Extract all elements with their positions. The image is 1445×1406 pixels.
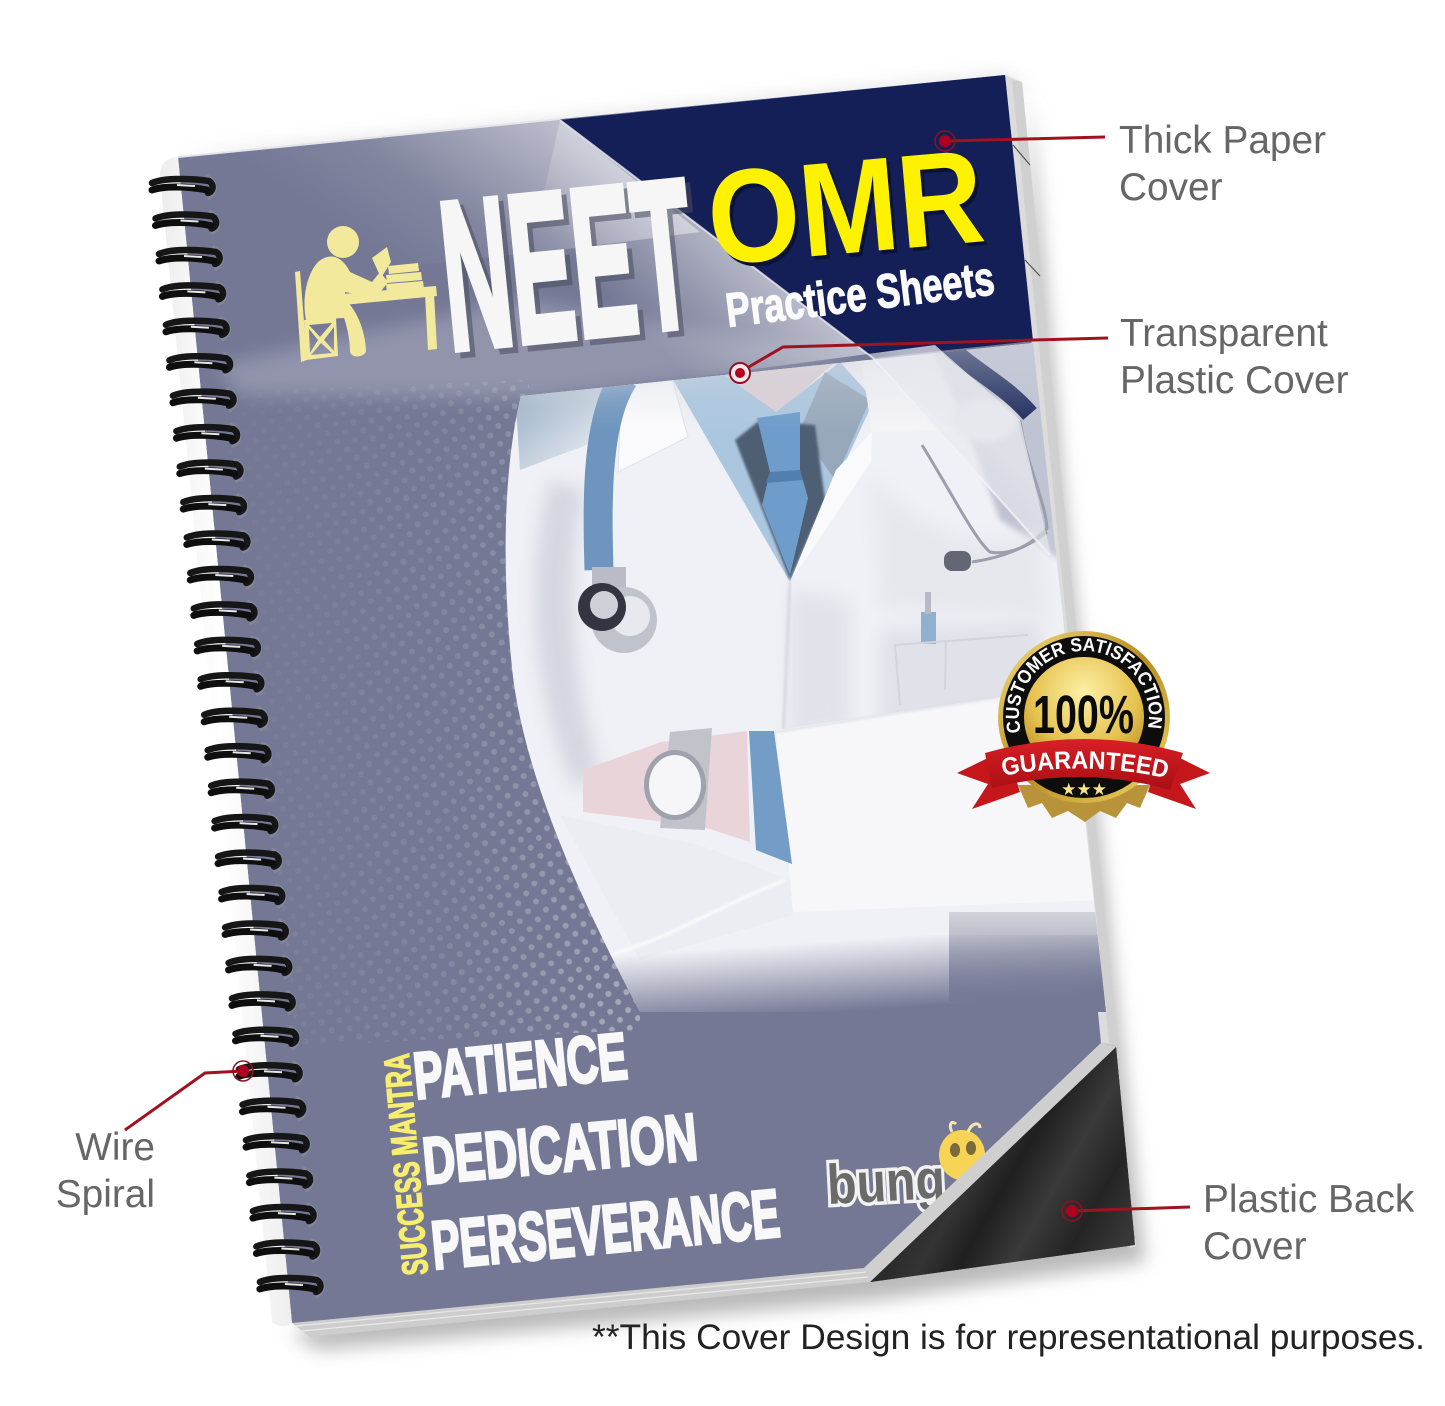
lower right dark area: [949, 912, 1119, 1002]
chair frame: [304, 317, 338, 360]
label: Transparent Plastic Cover: Plastic Cover: [1120, 359, 1349, 402]
label: Thick Paper Cover: Cover: [1119, 166, 1223, 209]
desk top: [342, 286, 437, 305]
gold seal points: [1018, 785, 1150, 822]
slogan: SUCCESS MANTRA: SUCCESS MANTRA: [376, 1052, 436, 1277]
panel: front cover: [178, 75, 1130, 1323]
hand and wrist: [583, 731, 750, 842]
desk leg: [425, 293, 437, 350]
book stack: [386, 263, 424, 292]
earpiece: [944, 551, 971, 571]
body and arm: [304, 257, 388, 320]
navy tube upper right: [948, 346, 1030, 414]
plastic back cover corner overlay: [864, 1043, 1135, 1282]
leg of student: [342, 300, 366, 356]
label: Wire Spiral: Wire: [75, 1126, 155, 1169]
back cover corner: [870, 1047, 1136, 1282]
title: NEET: [431, 134, 709, 401]
left white binding strip: [160, 157, 292, 1326]
title: OMR: OMR: [705, 126, 993, 298]
forearm sleeve: [780, 697, 1094, 900]
right stethoscope tubes: [922, 420, 1047, 562]
coat edge: [783, 582, 790, 740]
cover top edge highlight: [178, 119, 560, 157]
callout: wire spiral pointer: [125, 1061, 253, 1130]
title: OMR: OMR: [702, 122, 989, 294]
left collar: [618, 378, 688, 472]
pen: [921, 592, 936, 644]
label: Plastic Back Cover: Plastic Back: [1203, 1178, 1415, 1221]
head: [327, 226, 359, 258]
chair back: [295, 271, 307, 362]
footnote: **This Cover Design is for representational purposes.: [592, 1318, 1425, 1357]
paper block: right edge: [1005, 75, 1118, 1045]
wire spiral coils: [152, 177, 322, 1296]
lower coat fold: [560, 815, 793, 960]
text: NEET: [437, 140, 709, 400]
curved badge text: CUSTOMER SATISFACTION: [1006, 638, 1162, 733]
slogan: PATIENCE: PATIENCE: [410, 1018, 630, 1113]
paper block: bottom edge: [292, 1268, 870, 1337]
label: Wire Spiral: Spiral: [56, 1173, 155, 1216]
logo: bung bee: [825, 1122, 985, 1216]
navy header block: [560, 75, 1033, 358]
top fade: [594, 350, 1036, 420]
callout: transparent plastic cover pointer: [730, 338, 1108, 383]
badge black ring: [1003, 636, 1165, 798]
callout: plastic back cover pointer: [1062, 1201, 1190, 1221]
bottom fade: [614, 935, 1106, 1012]
blue shirt cuff: [749, 731, 792, 864]
pocket: [895, 635, 1028, 705]
label: Thick Paper Cover: Thick Paper: [1119, 119, 1326, 162]
halftone dots: [319, 380, 640, 1042]
badge: 100% customer satisfaction guaranteed: [957, 631, 1210, 822]
transparent film glare: [178, 120, 1052, 560]
neck: [710, 364, 833, 412]
icon: student reading at desk: [295, 226, 437, 362]
subtitle: Practice Sheets: Practice Sheets: [723, 252, 997, 338]
background top right: [948, 343, 1056, 560]
tie shadow: [735, 420, 825, 580]
book drop shadow: [178, 75, 1145, 1350]
shirt: [672, 362, 874, 582]
slogan: PERSEVERANCE: PERSEVERANCE: [428, 1175, 783, 1284]
blue stethoscope tube: [598, 378, 624, 570]
slogan: DEDICATION: DEDICATION: [420, 1099, 700, 1198]
coat shading: [535, 480, 600, 790]
logo: bung bee: bung: [825, 1147, 946, 1216]
text: NEET: [431, 134, 703, 395]
badge inner gold: [1024, 657, 1144, 777]
label: Transparent Plastic Cover: Transparent: [1120, 312, 1328, 355]
right collar and lapel: [861, 360, 874, 412]
tie: [757, 412, 808, 575]
doctor photo: [506, 343, 1106, 1012]
ribbon text: GUARANTEED: [1002, 751, 1168, 777]
open book: [372, 247, 391, 278]
badge gold ring: [998, 631, 1170, 803]
label: Plastic Back Cover: Cover: [1203, 1225, 1307, 1268]
stars: ★★★: [1061, 780, 1107, 800]
watch: [644, 728, 712, 830]
stethoscope chest piece: [578, 567, 657, 653]
badge percent: 100%: [1033, 685, 1134, 745]
callout: thick paper cover pointer: [935, 131, 1105, 151]
ribbon: [957, 739, 1210, 809]
